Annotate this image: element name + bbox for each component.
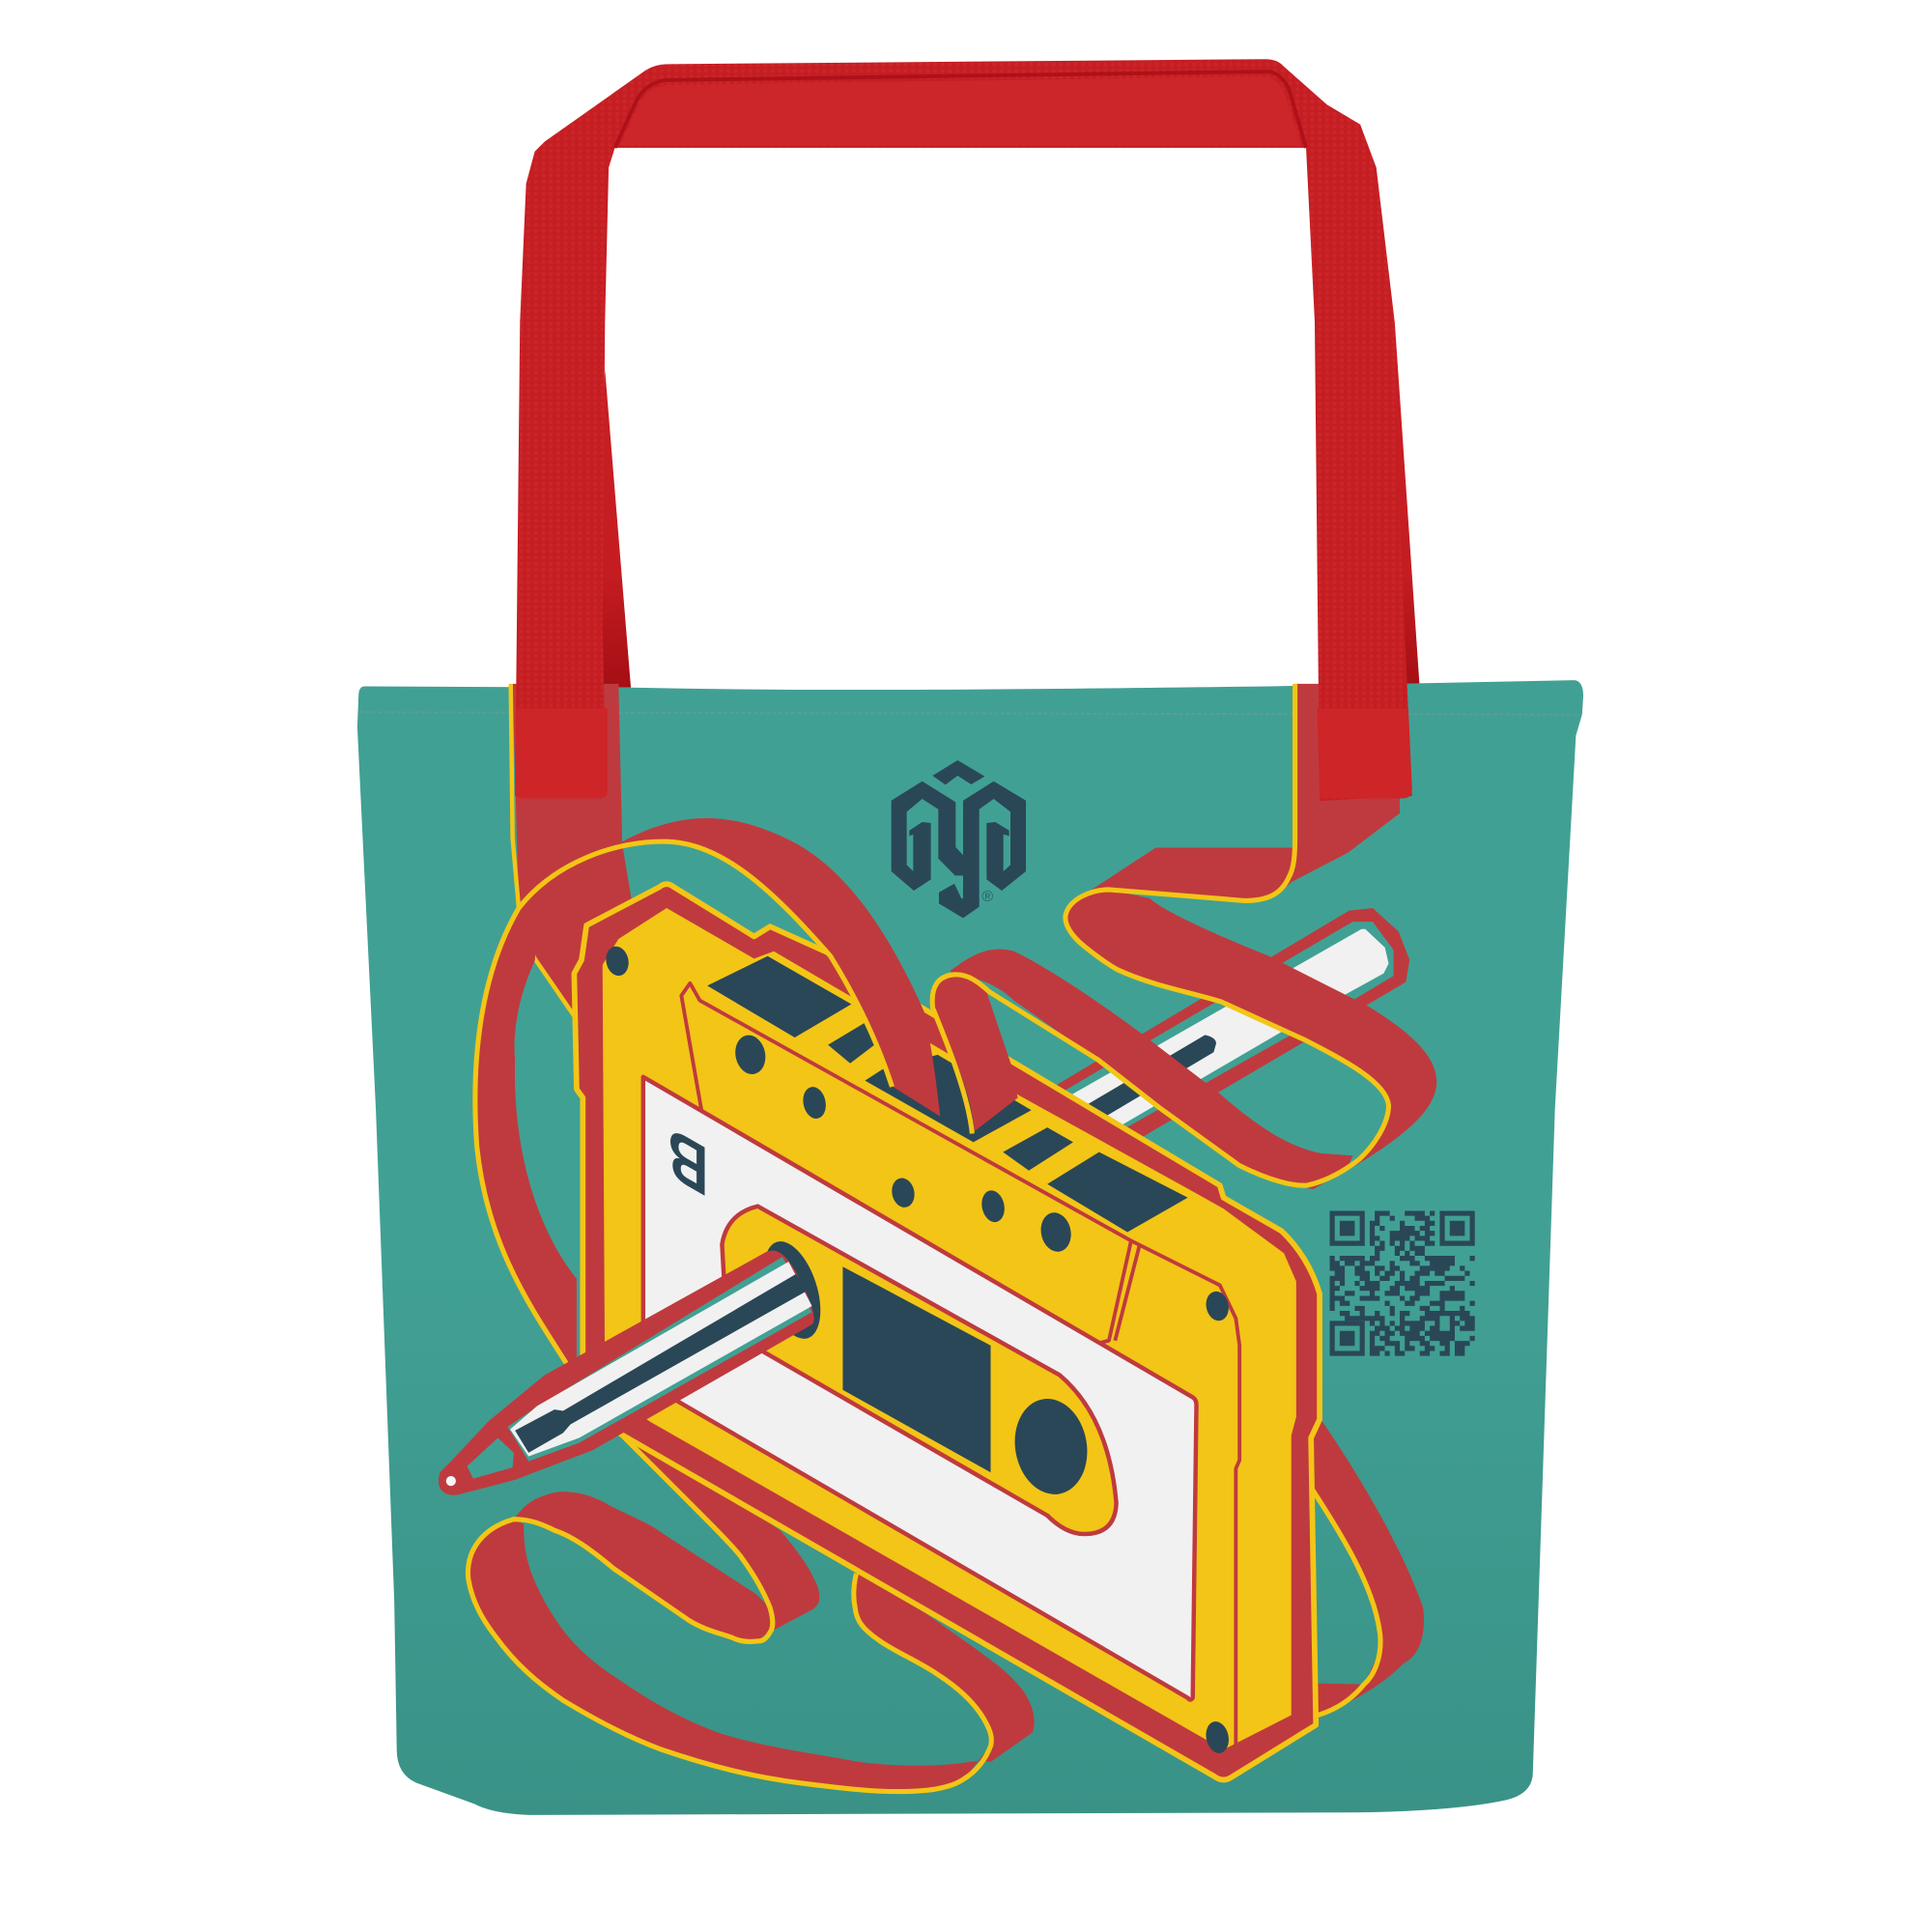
pencil front — [439, 1251, 814, 1495]
top band lighter panel — [620, 76, 1301, 146]
tape: small fold into slot — [931, 975, 1018, 1131]
pencil tip dot — [446, 1476, 456, 1486]
cassette top windows — [707, 956, 1188, 1233]
pencil outline — [439, 1251, 814, 1495]
right strap sewn end — [1318, 708, 1412, 799]
tape: lower centre loop — [854, 1559, 1035, 1762]
pencil white barrel — [510, 1262, 812, 1457]
tape: fold behind cassette — [621, 1430, 819, 1632]
tape: big left loop and arch — [475, 818, 940, 1378]
left spool hole — [753, 1235, 832, 1346]
tape strap under left handle — [511, 684, 640, 1018]
top band dark rim — [614, 71, 1306, 148]
QR finder centres — [1340, 1221, 1464, 1346]
right spool hole — [1008, 1393, 1094, 1500]
side letter B: B — [668, 1111, 708, 1213]
logo right letter and stem — [939, 781, 1026, 918]
cassette white label — [643, 1077, 1197, 1700]
pencil teal shadow — [508, 1257, 812, 1462]
pencil back end — [1047, 908, 1409, 1142]
logo top chevron — [932, 760, 984, 784]
cassette strip holes and screws — [604, 945, 1232, 1755]
handles — [515, 59, 1412, 801]
handle loop with straps — [515, 59, 1412, 801]
pencil teal cone — [467, 1438, 514, 1479]
back handle straps — [589, 323, 1419, 688]
left strap sewn end — [515, 708, 608, 799]
centre dark window — [842, 1266, 991, 1472]
tape: lower left loop — [468, 1520, 991, 1792]
cassette yellow body — [603, 908, 1296, 1749]
tape yellow edge at bottom — [468, 1435, 991, 1792]
QR data modules — [1330, 1213, 1475, 1353]
tape: upper diagonal band and right loop — [1065, 890, 1436, 1189]
tote bag body — [357, 680, 1583, 1815]
cassette outer shell — [574, 884, 1320, 1779]
tape: lower diagonal band — [950, 950, 1353, 1189]
pencil dark stripe — [515, 1274, 809, 1453]
QR finder patterns — [1332, 1213, 1472, 1353]
cassette raised strip — [681, 983, 1131, 1343]
QR code — [1330, 1213, 1475, 1353]
registered mark: ® — [981, 889, 993, 905]
logo left letter — [892, 781, 965, 891]
logo — [892, 760, 1026, 918]
cassette strip outlines — [1115, 1240, 1239, 1750]
tape yellow edge on right side — [932, 684, 1389, 1185]
tape: middle diagonal band — [514, 1492, 771, 1641]
tape: right loop — [1306, 1399, 1424, 1719]
cassette centre window panel — [722, 1207, 1117, 1534]
cassette — [574, 884, 1320, 1779]
tape: top section from right handle — [1067, 684, 1400, 918]
